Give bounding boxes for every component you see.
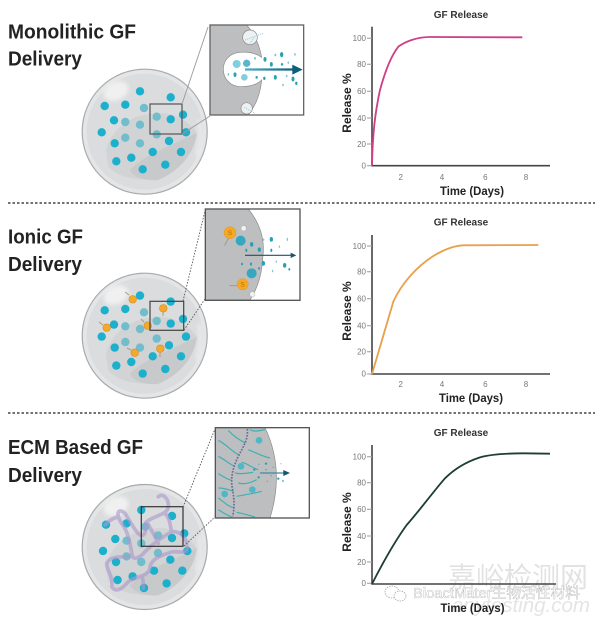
axes and ticks: [367, 445, 556, 584]
inset: pore burst release: [210, 25, 304, 117]
tick labels: 8: [524, 380, 529, 389]
chart: monolithic release: [340, 10, 550, 198]
tick labels: 20: [357, 140, 367, 149]
tick labels: 100: [353, 34, 367, 43]
chart title: GF Release: [434, 10, 489, 21]
y axis label: Release %: [340, 492, 354, 552]
x axis label: Time (Days): [439, 391, 503, 405]
release curve: pink: [372, 37, 522, 166]
tick labels: [353, 242, 529, 389]
tick labels: 60: [357, 505, 367, 514]
zoom selection box and connector lines: [150, 27, 210, 134]
tick labels: 8: [524, 173, 529, 182]
inset: ionic release: S: [228, 230, 233, 237]
tick labels: 6: [483, 380, 488, 389]
tick labels: 0: [362, 162, 367, 170]
panel: ionic GF delivery: [8, 209, 550, 405]
release curve: dark green: [372, 453, 550, 584]
tick labels: 4: [440, 380, 445, 389]
inset: ECM fiber release: [215, 428, 309, 518]
inset: ionic release: [205, 209, 300, 300]
tick labels: 40: [357, 114, 367, 123]
heading: monolithic: Monolithic GF: [8, 22, 136, 44]
tick labels: 0: [362, 579, 367, 588]
watermark: site name: 嘉峪检测网: [448, 562, 588, 593]
heading: ionic: Ionic GF: [8, 226, 83, 248]
tick labels: 100: [353, 452, 367, 462]
panel: ECM based GF delivery: [8, 428, 556, 615]
chart title: GF Release: [434, 428, 489, 439]
y axis label: Release %: [340, 73, 354, 133]
sphere with growth factor dots and orange ions: [82, 273, 207, 398]
divider dotted lines: [8, 203, 595, 413]
tick labels: 60: [357, 294, 367, 304]
tick labels: 4: [440, 173, 445, 182]
sphere with growth factor dots: [82, 69, 207, 194]
heading: monolithic: Delivery: [8, 48, 83, 70]
heading: monolithic: [8, 22, 136, 70]
tick labels: 80: [357, 60, 367, 69]
zoom selection box and connector lines: [141, 429, 215, 546]
x axis label: Time (Days): [440, 184, 504, 198]
axes and ticks: [367, 235, 550, 374]
tick labels: 20: [357, 558, 367, 567]
tick labels: 0: [362, 370, 367, 378]
tick labels: 100: [353, 242, 367, 251]
tick labels: [353, 452, 367, 588]
chart: ECM release: [340, 428, 556, 615]
tick labels: 6: [483, 173, 488, 182]
y axis label: Release %: [340, 281, 354, 341]
tick labels: 20: [357, 348, 367, 356]
tick labels: 80: [357, 478, 367, 488]
watermark: account name: BioactMater生物活性材料: [413, 585, 580, 602]
chart: ionic release: [340, 218, 550, 405]
tick labels: 2: [398, 173, 403, 182]
tick labels: 80: [357, 268, 367, 276]
inset: ionic release: S: [240, 282, 245, 289]
heading: ionic: Delivery: [8, 254, 83, 276]
heading: ECM: Delivery: [8, 465, 83, 487]
heading: ECM: [8, 437, 143, 487]
sphere with dots and purple ECM fibers: [82, 484, 207, 610]
axes and ticks: [367, 27, 550, 166]
tick labels: 40: [357, 532, 367, 541]
tick labels: 40: [357, 322, 367, 330]
heading: ECM: ECM Based GF: [8, 437, 143, 459]
heading: ionic: [8, 226, 83, 276]
tick labels: 60: [357, 87, 367, 96]
tick labels: 2: [398, 380, 403, 389]
release curve: orange: [372, 245, 538, 374]
zoom selection box and connector lines: [150, 211, 205, 330]
watermark: site url: anytesting.com: [452, 595, 590, 617]
tick labels: [353, 34, 529, 182]
panel: monolithic GF delivery: [8, 10, 550, 198]
x axis label: Time (Days): [440, 601, 504, 615]
watermark: wechat icon: [385, 586, 406, 601]
chart title: GF Release: [434, 218, 489, 228]
